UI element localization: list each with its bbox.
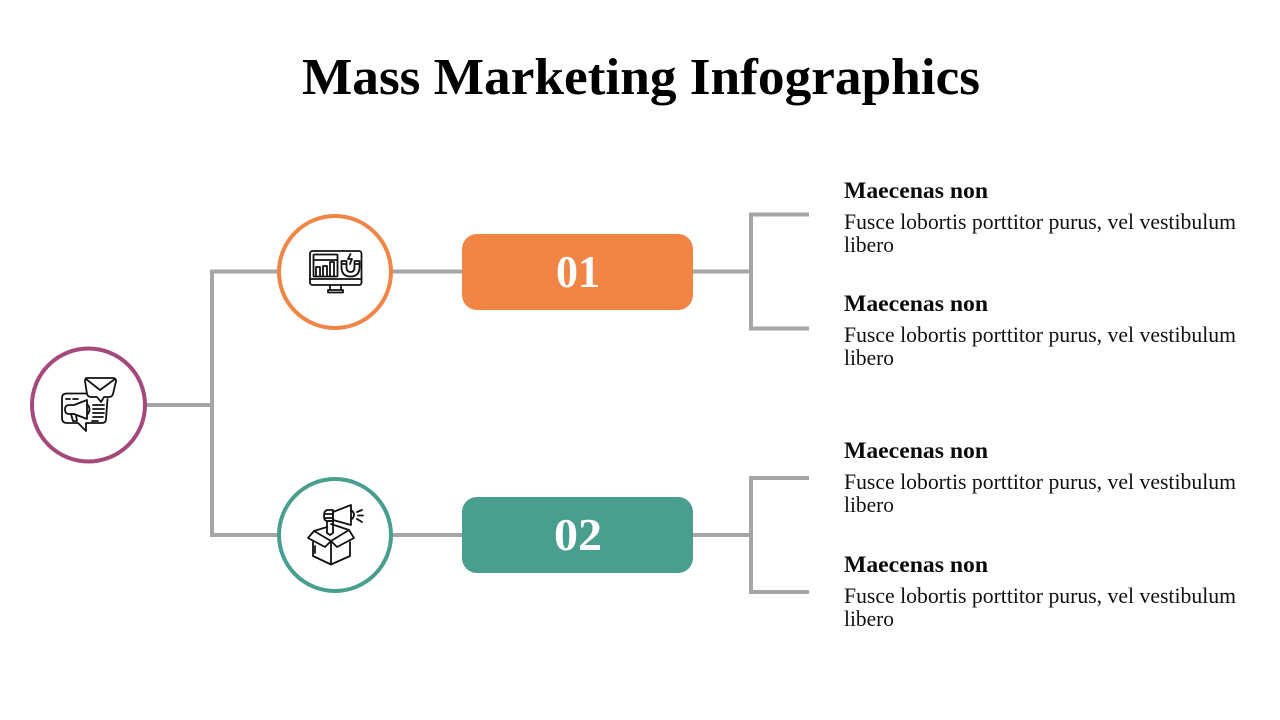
text block 3 <box>844 438 1236 517</box>
connector: branch 02 <box>392 478 809 592</box>
text block 1: Fusce lobortis porttitor purus, vel vestibulum <box>844 209 1236 234</box>
badge 02: 02 <box>554 510 602 560</box>
root circle with marketing icon <box>32 348 145 462</box>
badge 01: 01 <box>556 247 600 297</box>
connector: branch 01 <box>392 214 809 328</box>
text block 2: libero <box>844 345 894 370</box>
title: Mass Marketing Infographics <box>302 49 980 106</box>
text block 1 <box>844 178 1236 257</box>
icon: speech bubbles with megaphone and envelope <box>62 378 116 431</box>
connector: root to branches <box>146 272 278 535</box>
text block 2: Fusce lobortis porttitor purus, vel vestibulum <box>844 322 1236 347</box>
circle 02 with box and megaphone icon <box>279 479 391 591</box>
text block 3: libero <box>844 492 894 517</box>
text block 4 <box>844 552 1236 631</box>
text block 2: Maecenas non <box>844 291 988 316</box>
text block 4: libero <box>844 606 894 631</box>
text block 4: Maecenas non <box>844 552 988 577</box>
icon: open box with megaphone <box>308 505 363 564</box>
icon: monitor with chart and magnet <box>310 251 362 292</box>
text block 1: libero <box>844 232 894 257</box>
circle 01 with analytics monitor icon <box>279 216 391 328</box>
badge 02 <box>462 497 693 573</box>
text block 3: Maecenas non <box>844 438 988 463</box>
text block 4: Fusce lobortis porttitor purus, vel vestibulum <box>844 583 1236 608</box>
text block 1: Maecenas non <box>844 178 988 203</box>
badge 01 <box>462 234 693 310</box>
text block 3: Fusce lobortis porttitor purus, vel vestibulum <box>844 469 1236 494</box>
text block 2 <box>844 291 1236 370</box>
